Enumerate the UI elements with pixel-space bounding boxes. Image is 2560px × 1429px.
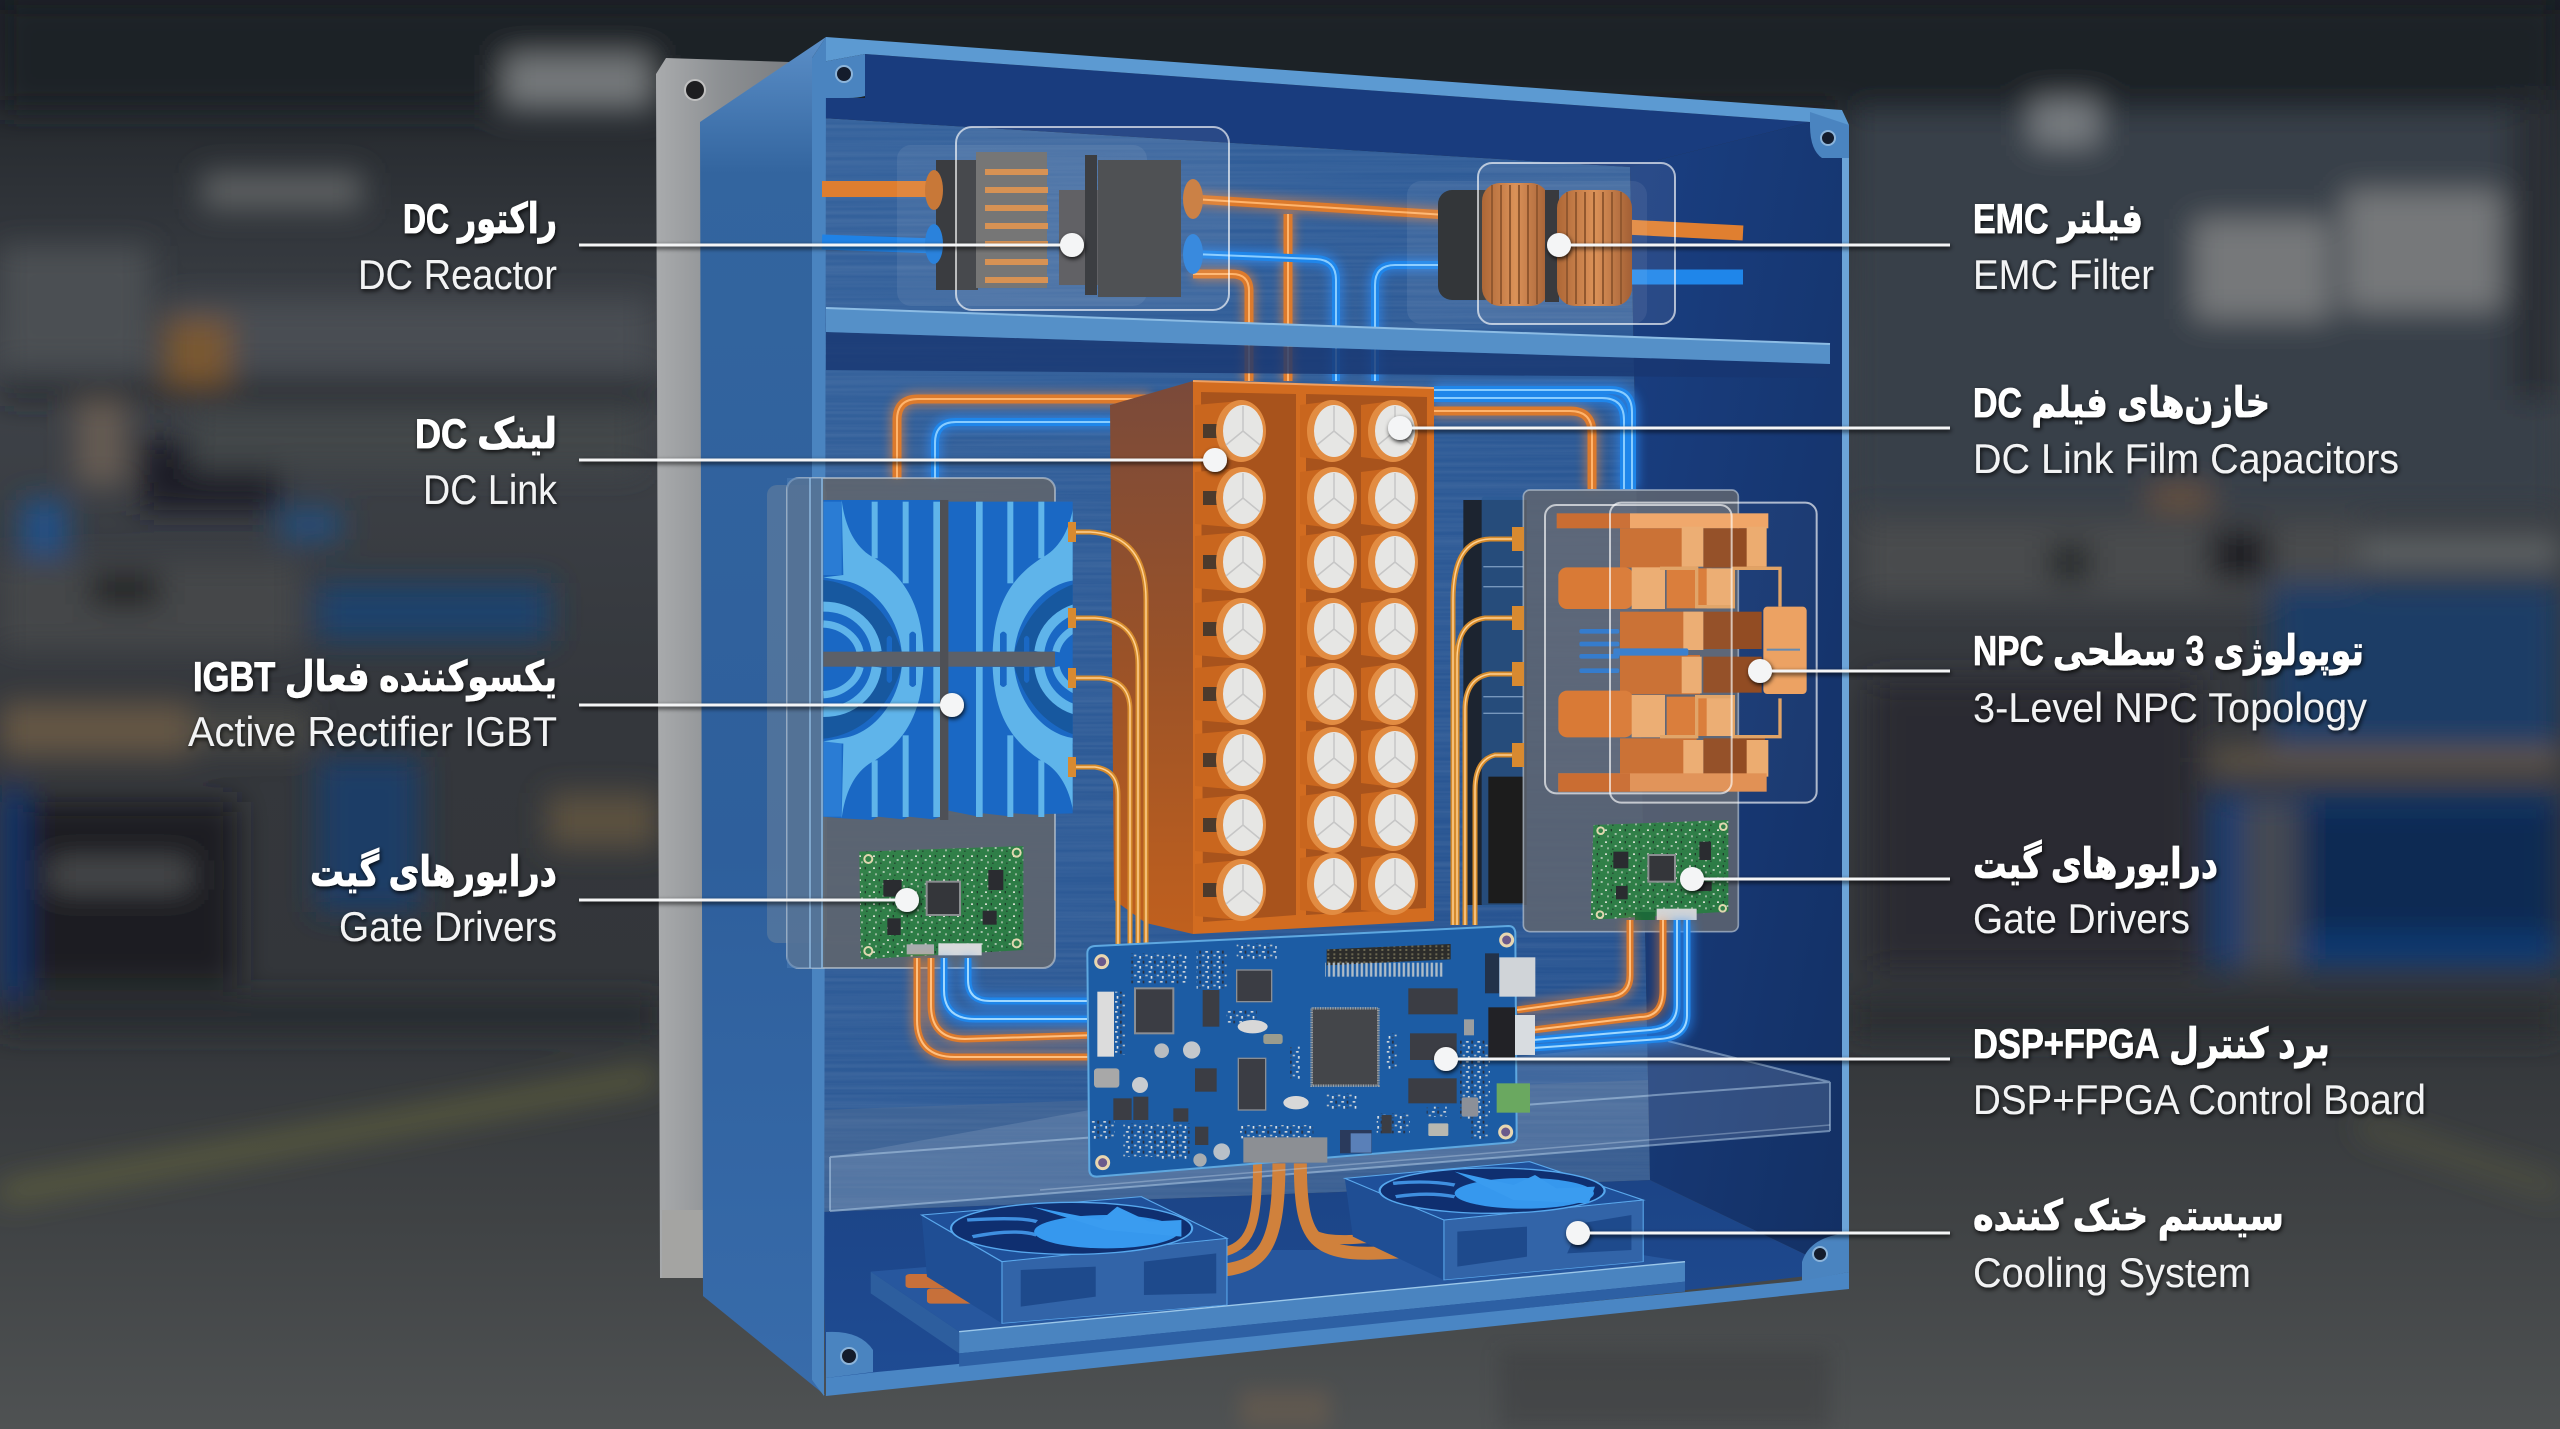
label DC link: DC Link: [423, 466, 558, 513]
EMC filter module: [1407, 163, 1675, 324]
leader gate drivers left: [579, 888, 919, 912]
tray front edge over board: [1040, 1125, 1830, 1190]
leader lines and dots: [579, 233, 1950, 1245]
control board: [1087, 926, 1535, 1177]
copper stubs: [906, 1274, 976, 1304]
shelf: [826, 308, 1830, 378]
label gate drivers right: Gate Drivers: [1973, 895, 2190, 942]
mounting plate: [656, 58, 790, 1278]
lower signal pipes: [917, 920, 1687, 1057]
leader cooling system: [1566, 1221, 1950, 1245]
label active rectifier: Active Rectifier IGBT: [188, 708, 557, 755]
frame rim top: [822, 37, 1849, 125]
pin header: [1325, 944, 1451, 977]
left capacitor column: [1195, 400, 1266, 921]
gold signal wires: [1068, 522, 1524, 945]
corner block bottom right: [1802, 1233, 1849, 1281]
left fan: [922, 1197, 1227, 1323]
labels right: [1973, 195, 2426, 1296]
npc power stack: [1557, 513, 1807, 792]
mounting holes: [1096, 934, 1513, 1169]
leader gate drivers right: [1680, 867, 1950, 891]
frame rim left: [812, 37, 826, 1396]
label gate drivers right: درایورهای گیت: [1973, 839, 2218, 889]
reflection on floor: [1240, 1350, 1830, 1429]
frame rim right: [1842, 125, 1849, 1272]
label DC reactor: DC Reactor: [358, 251, 557, 298]
gate driver pcb left: [859, 846, 1023, 959]
connectors: [1097, 953, 1535, 1163]
label cooling system: Cooling System: [1973, 1249, 2251, 1296]
left IGBT module plate: [767, 478, 1093, 968]
blue busbar coil: [1579, 629, 1688, 673]
leader DC reactor: [579, 233, 1084, 257]
top pipes: [822, 189, 1743, 489]
label DC link: [415, 410, 558, 513]
main processor: [1312, 1008, 1378, 1086]
label EMC filter: [1973, 195, 2154, 298]
glass tray: [830, 1041, 1830, 1211]
label gate drivers right: [1973, 839, 2218, 942]
label gate drivers left: [310, 847, 557, 950]
label gate drivers left: Gate Drivers: [339, 903, 557, 950]
capacitors and crystals: [1094, 1019, 1478, 1167]
middle capacitor column: [1300, 400, 1357, 915]
leader film capacitors: [1388, 416, 1950, 440]
label film capacitors: [1973, 379, 2399, 482]
interior floor: [822, 1180, 1842, 1390]
label NPC topology: توپولوژی 3 سطحی NPC: [1973, 627, 2364, 676]
label NPC topology: 3-Level NPC Topology: [1973, 684, 2367, 731]
interior back wall: [822, 118, 1650, 1212]
left side panel: [700, 37, 826, 1396]
label EMC filter: EMC Filter: [1973, 251, 2154, 298]
copper heat pipes: [1219, 1163, 1402, 1271]
heatsink: [823, 500, 1093, 820]
gate driver pcb right: [1591, 820, 1728, 920]
label NPC topology: [1973, 627, 2367, 731]
frame rim bottom: [826, 1272, 1849, 1396]
glass covers: [1545, 503, 1817, 803]
label cooling system: [1973, 1192, 2284, 1296]
label cooling system: سیستم خنک کننده: [1973, 1192, 2284, 1240]
chips: [1113, 970, 1458, 1145]
label DC reactor: راکتور DC: [403, 195, 557, 244]
corner block top right: [1810, 112, 1849, 158]
copper windings: [985, 172, 1048, 280]
DC reactor module: [897, 127, 1229, 310]
right fan: [1345, 1162, 1643, 1280]
right interior wall: [1630, 122, 1842, 1272]
leader EMC filter: [1547, 233, 1950, 257]
label film capacitors: خازن‌های فیلم DC: [1973, 379, 2270, 427]
leader active rectifier: [579, 693, 964, 717]
smd components: [1092, 943, 1490, 1160]
label gate drivers left: درایورهای گیت: [310, 847, 557, 897]
leader control board: [1434, 1047, 1950, 1071]
label active rectifier: یکسوکننده فعال IGBT: [193, 653, 557, 702]
leader NPC topology: [1748, 659, 1950, 683]
label film capacitors: DC Link Film Capacitors: [1973, 435, 2399, 482]
label control board: [1973, 1020, 2426, 1123]
corner block top left: [822, 54, 865, 98]
label control board: برد کنترل DSP+FPGA: [1973, 1020, 2330, 1069]
cooling system: [871, 1162, 1685, 1367]
right capacitor column: [1361, 400, 1418, 915]
label EMC filter: فیلتر EMC: [1973, 195, 2143, 244]
label active rectifier: [188, 653, 557, 755]
base plate: [871, 1250, 1685, 1367]
capacitor bank: [1110, 381, 1434, 934]
labels left: [188, 195, 558, 950]
leader DC link: [579, 448, 1227, 472]
corner block bottom left: [826, 1332, 873, 1378]
label DC reactor: [358, 195, 557, 298]
right NPC module plate: [1463, 490, 1817, 932]
label control board: DSP+FPGA Control Board: [1973, 1076, 2426, 1123]
enclosure cabinet: [656, 37, 1849, 1396]
label DC link: لینک DC: [415, 410, 557, 457]
interior ceiling: [822, 54, 1810, 167]
